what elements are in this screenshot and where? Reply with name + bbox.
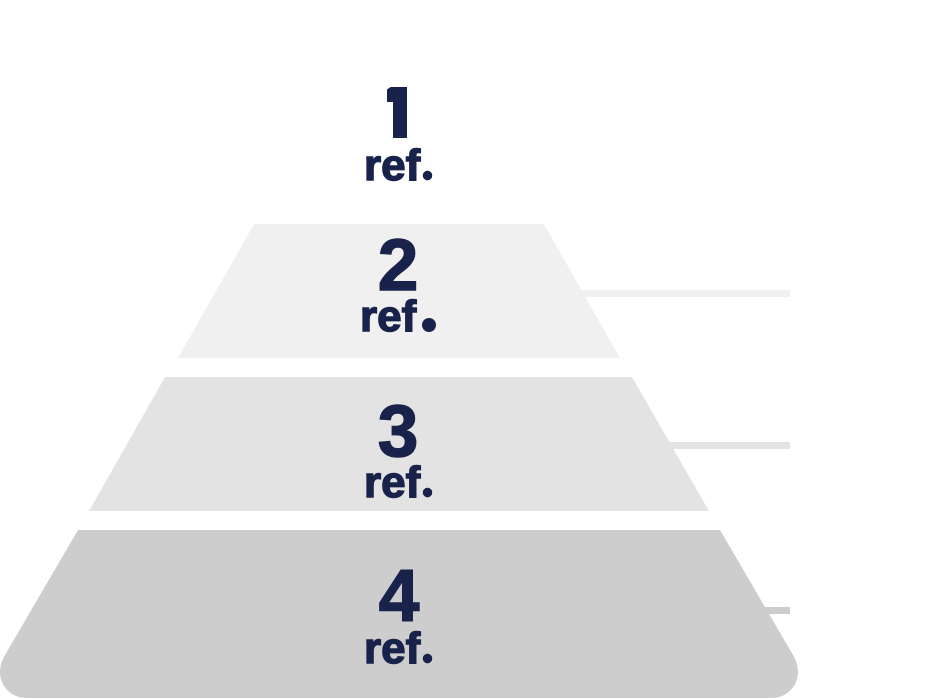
tier 2: . [412,225,446,359]
connector line: tier 2 [580,290,790,297]
pyramid infographic [0,87,798,698]
tier 4: 4 [379,556,420,637]
tier 3: 3 [378,391,418,472]
tier 2: ref [360,292,417,341]
tier 4: ref [364,624,421,673]
tier 1: top label [366,87,432,182]
tier 1: top label: 1 [380,73,420,154]
tier 4 [0,530,798,698]
connector line: tier 3 [665,442,790,449]
tier 1: top label: ref [364,141,421,190]
tier 3: ref [364,458,421,507]
tier 3 [89,377,709,512]
connector line: tier 4 [755,607,790,614]
tier 3: . [418,434,437,512]
tier 2: 2 [378,225,418,306]
tier 4: . [418,600,437,678]
tier 2 [178,224,620,359]
tier 1: top label: . [418,118,437,196]
